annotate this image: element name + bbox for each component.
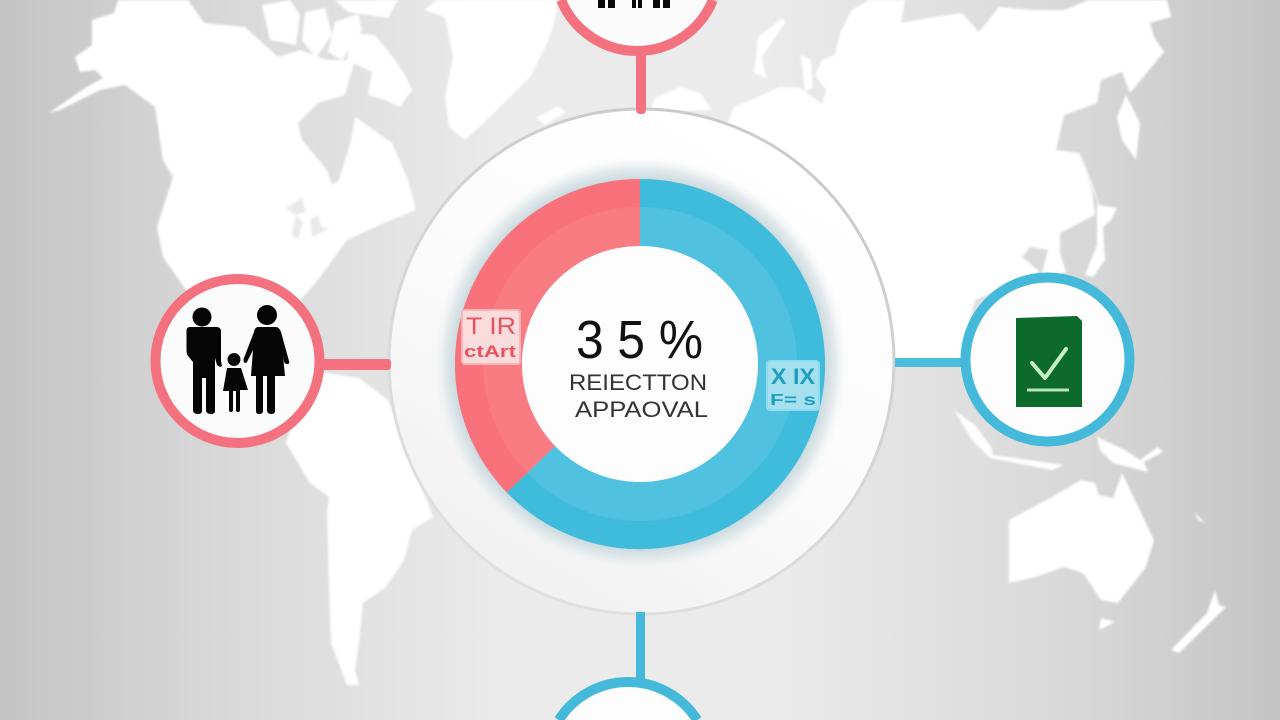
donut centre bbox=[522, 246, 758, 482]
blue stamp: X IX bbox=[771, 364, 815, 389]
blue stamp: F= s bbox=[770, 392, 816, 409]
icon: family bbox=[186, 305, 289, 414]
map: japan and east islands bbox=[1079, 150, 1117, 277]
map: sakhalin bbox=[1117, 95, 1140, 160]
centre label: line one: REIECTTON bbox=[569, 370, 707, 395]
blue stamp bbox=[767, 361, 819, 410]
donut: rejection segment bbox=[489, 212, 640, 469]
donut glow bbox=[432, 156, 848, 572]
outer white ring bbox=[389, 109, 894, 614]
icon: family legs bbox=[598, 0, 670, 8]
map: tasmania bbox=[1099, 618, 1115, 630]
red stamp: ctArt bbox=[464, 342, 516, 361]
map: scandinavia and novaya zemlya bbox=[754, 18, 813, 92]
map: arctic islands bbox=[262, 0, 412, 107]
child bbox=[223, 353, 248, 412]
icon: approved passport bbox=[1016, 316, 1082, 407]
left node bbox=[156, 279, 320, 443]
connector: right bbox=[895, 358, 965, 367]
map: white patch above ring bbox=[536, 87, 712, 125]
map: indonesia bbox=[954, 410, 1064, 470]
donut: rejection outer band bbox=[469, 193, 640, 483]
donut: approval segment bbox=[531, 212, 792, 515]
map: north america bbox=[49, 0, 416, 360]
donut chart bbox=[469, 193, 811, 535]
connector: top bbox=[636, 50, 646, 114]
connector: bottom bbox=[636, 612, 645, 682]
donut: approval outer band bbox=[517, 193, 811, 535]
map: new zealand bbox=[1171, 513, 1226, 653]
map: australia bbox=[1009, 473, 1154, 603]
map: south america bbox=[286, 372, 433, 685]
map: new guinea bbox=[1097, 437, 1163, 472]
red stamp bbox=[462, 310, 520, 364]
centre percentage: 3 5 % bbox=[576, 310, 703, 370]
map: eurasia bbox=[720, 0, 1171, 360]
bottom node bbox=[559, 682, 697, 720]
red stamp: T IR bbox=[466, 313, 516, 340]
woman bbox=[244, 305, 289, 414]
map: greenland bbox=[424, 0, 559, 140]
right node bbox=[966, 278, 1130, 442]
top node bbox=[561, 0, 713, 51]
man bbox=[186, 308, 222, 414]
centre label: line two: APPAOVAL bbox=[575, 397, 708, 422]
connector: left bbox=[320, 359, 391, 370]
map: great lakes bbox=[286, 198, 330, 240]
